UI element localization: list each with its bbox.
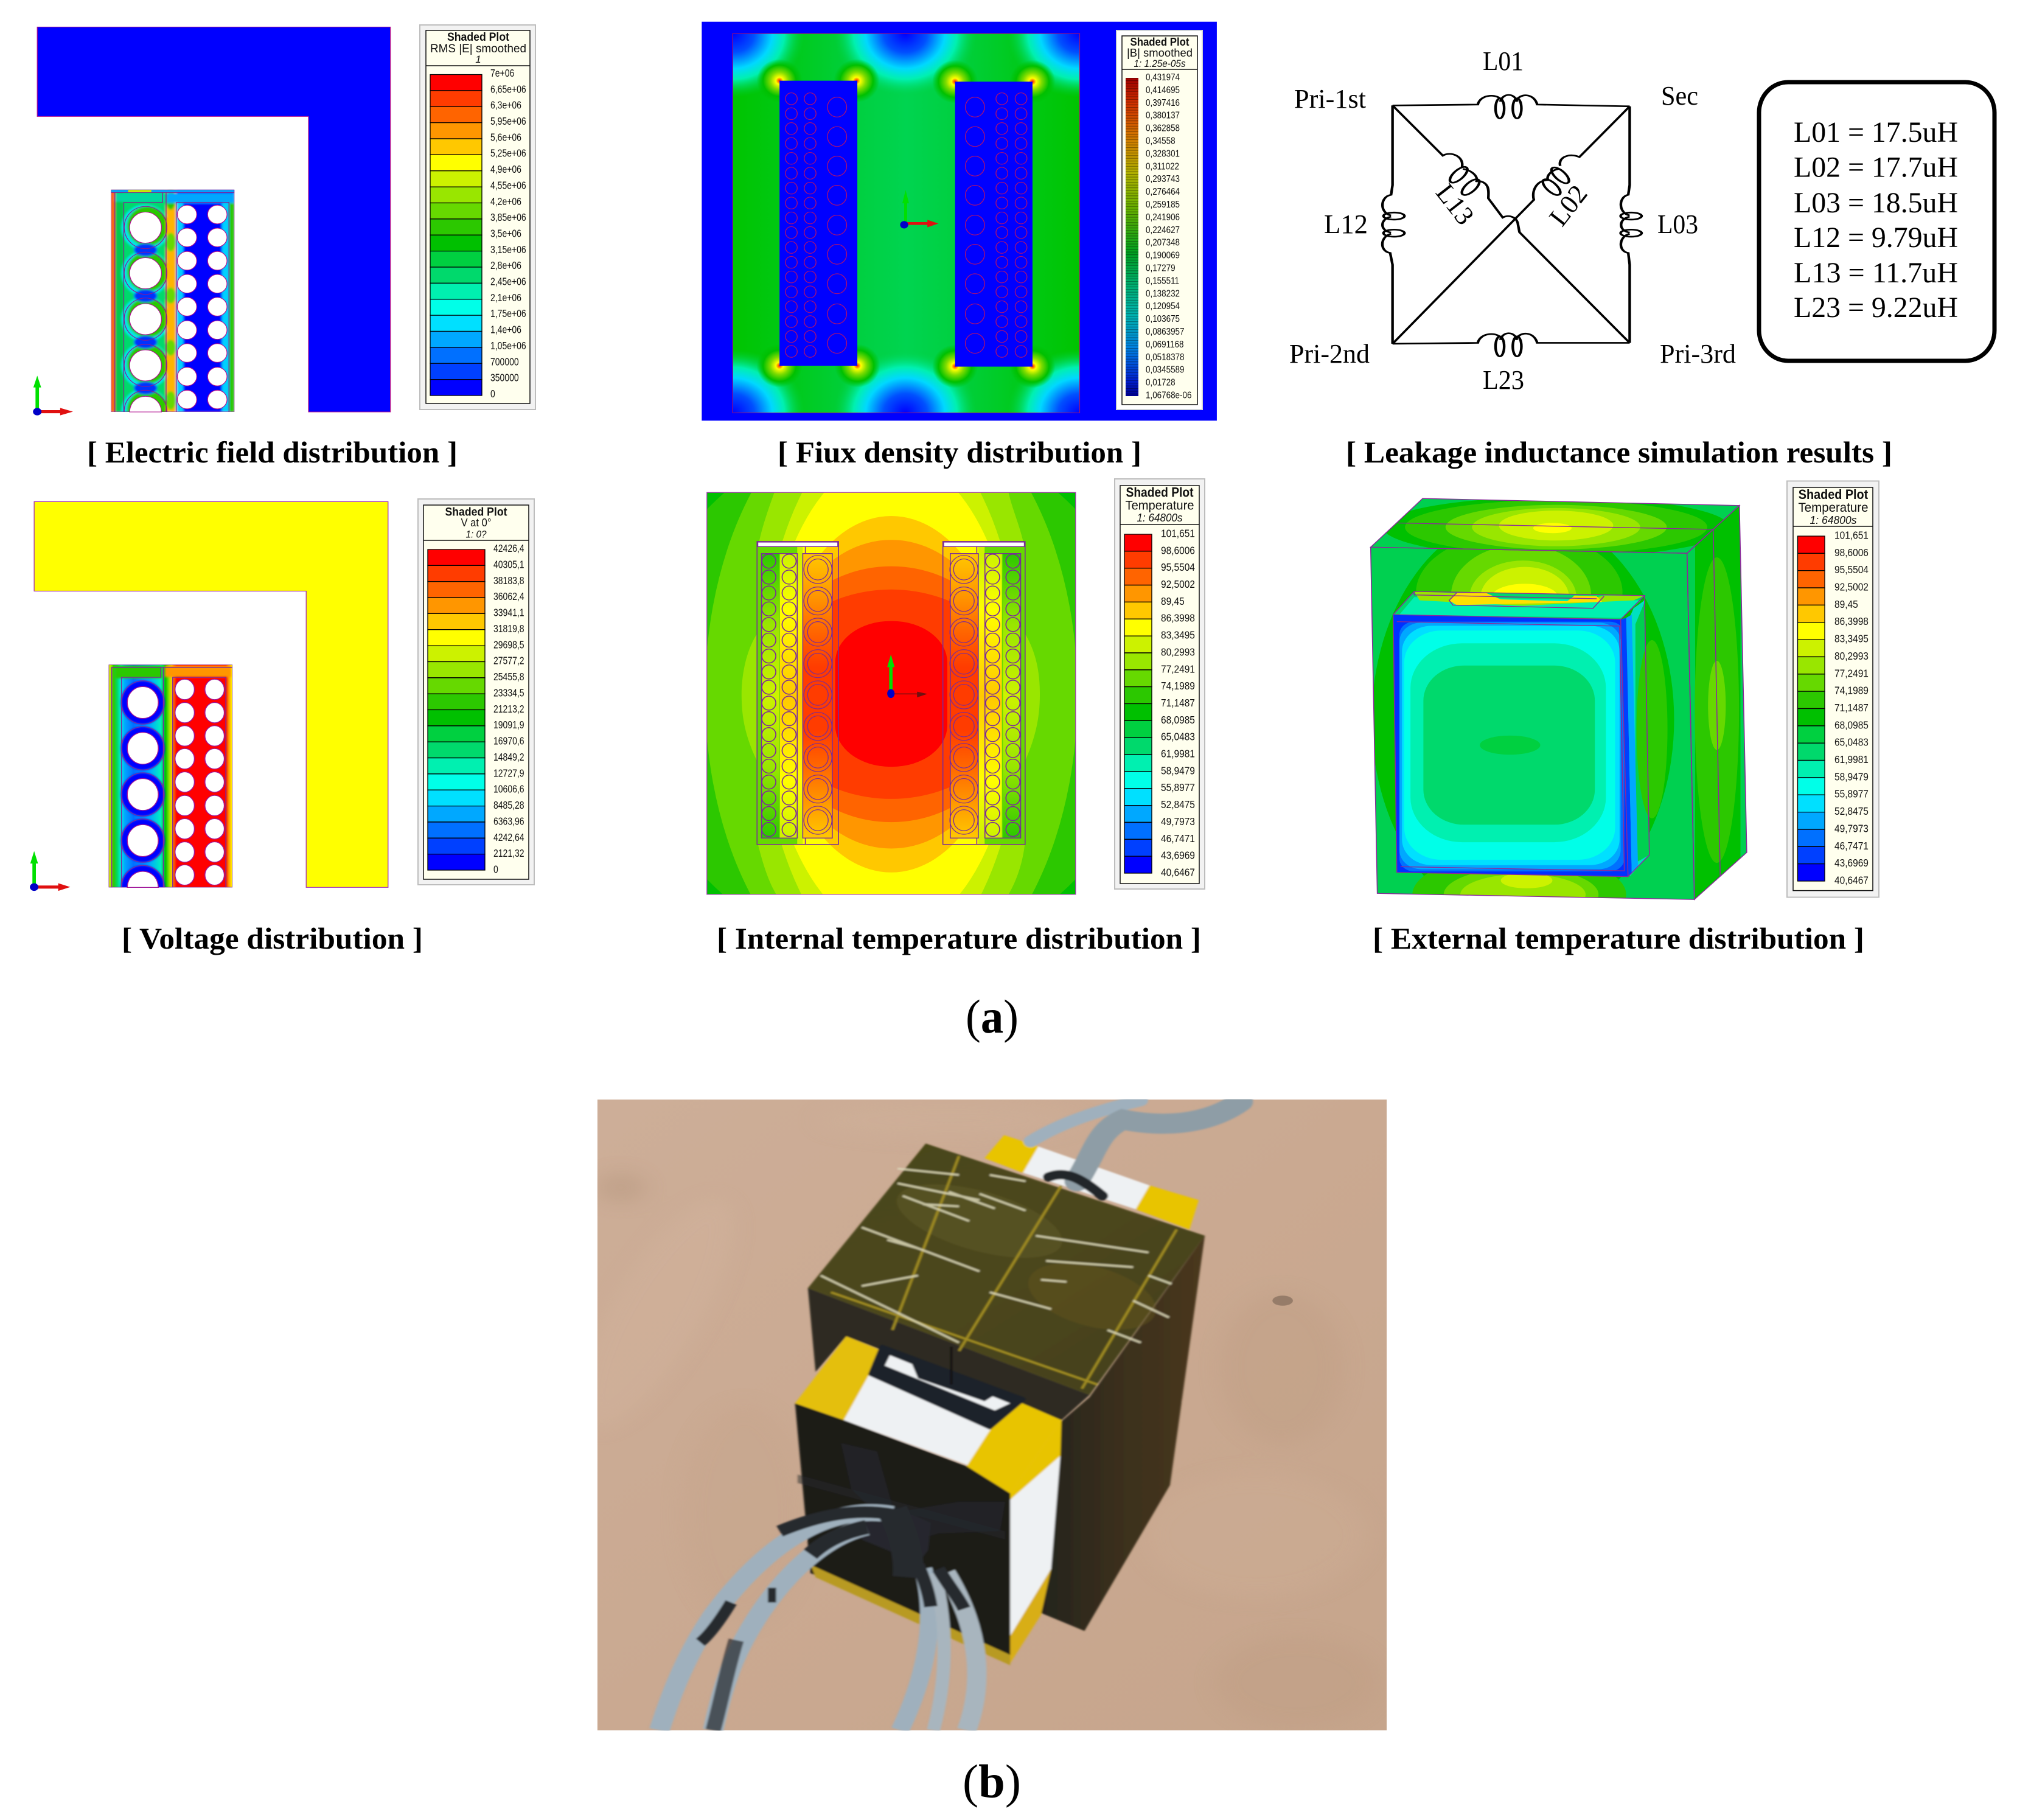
legend: internal temperature: 89,45 bbox=[1161, 595, 1185, 607]
legend: electric field: 7e+06 bbox=[490, 68, 514, 79]
legend: electric field bbox=[420, 25, 535, 410]
legend: external temperature: 55,8977 bbox=[1834, 788, 1869, 800]
legend: flux density: 0,155511 bbox=[1146, 276, 1179, 287]
legend: flux density: 0,01728 bbox=[1146, 378, 1176, 388]
circuit labels: Pri-3rd bbox=[1660, 339, 1736, 369]
legend: voltage: 29698,5 bbox=[493, 640, 524, 651]
circuit labels: Pri-2nd bbox=[1289, 339, 1370, 369]
label: (a): (a) bbox=[966, 990, 1019, 1043]
circuit labels: L01 bbox=[1483, 46, 1524, 76]
legend: electric field: 350000 bbox=[490, 372, 519, 384]
caption: flux density: [ Fiux density distribution ] bbox=[778, 435, 1141, 469]
legend: internal temperature: 58,9479 bbox=[1161, 764, 1195, 777]
legend: external temperature: 68,0985 bbox=[1834, 719, 1869, 731]
electric field plot bbox=[33, 27, 391, 434]
legend: voltage: Shaded Plot bbox=[445, 506, 507, 518]
legend: voltage: 0 bbox=[493, 864, 498, 876]
circuit labels: L12 bbox=[1324, 209, 1368, 239]
legend: flux density: 0,0691168 bbox=[1146, 340, 1183, 350]
legend: electric field: 0 bbox=[490, 389, 495, 400]
legend: electric field: 1,4e+06 bbox=[490, 324, 521, 336]
legend: electric field: 3,15e+06 bbox=[490, 244, 526, 256]
legend: electric field: 4,2e+06 bbox=[490, 196, 521, 207]
inductance values box: L02 = 17.7uH bbox=[1794, 152, 1958, 184]
legend: external temperature: 52,8475 bbox=[1834, 805, 1869, 817]
inductor circuit diagram bbox=[1289, 46, 1736, 395]
legend: external temperature: 40,6467 bbox=[1834, 874, 1869, 887]
legend: internal temperature: 92,5002 bbox=[1161, 578, 1195, 590]
legend: flux density: 0,293743 bbox=[1146, 174, 1180, 185]
legend: voltage: V at 0° bbox=[461, 517, 492, 529]
front coil black face bbox=[795, 1403, 1012, 1657]
inductance values box: L03 = 18.5uH bbox=[1794, 187, 1958, 219]
legend: flux density: 0,0518378 bbox=[1146, 352, 1185, 363]
legend: electric field: 1 bbox=[475, 54, 481, 65]
legend: flux density: 0,0863957 bbox=[1146, 327, 1185, 337]
legend: internal temperature: 86,3998 bbox=[1161, 612, 1195, 624]
flux density plot bbox=[702, 22, 1217, 421]
legend: internal temperature: 49,7973 bbox=[1161, 815, 1195, 828]
legend: external temperature: Shaded Plot bbox=[1799, 487, 1869, 502]
legend: external temperature: 46,7471 bbox=[1834, 840, 1869, 852]
legend: internal temperature: 71,1487 bbox=[1161, 697, 1195, 709]
legend: voltage: 1: 0? bbox=[466, 528, 487, 540]
legend: electric field: 5,25e+06 bbox=[490, 148, 526, 159]
circuit labels: L03 bbox=[1657, 209, 1698, 239]
legend: electric field: 1,05e+06 bbox=[490, 341, 526, 352]
caption: leakage inductance: [ Leakage inductance simulation results ] bbox=[1346, 435, 1892, 469]
legend: flux density: 0,34558 bbox=[1146, 136, 1176, 147]
caption: voltage: [ Voltage distribution ] bbox=[122, 921, 423, 955]
legend: internal temperature: 61,9981 bbox=[1161, 747, 1195, 760]
legend: external temperature: 65,0483 bbox=[1834, 736, 1869, 748]
legend: flux density: 0,311022 bbox=[1146, 161, 1179, 172]
legend: electric field: 5,6e+06 bbox=[490, 132, 521, 144]
legend: internal temperature: 98,6006 bbox=[1161, 544, 1195, 557]
panel: voltage distribution bbox=[30, 499, 534, 955]
legend: internal temperature bbox=[1115, 479, 1205, 889]
label: (b): (b) bbox=[963, 1755, 1021, 1808]
front coil top with yellow and white tape bbox=[795, 1336, 1061, 1500]
legend: electric field: 4,9e+06 bbox=[490, 164, 521, 176]
legend: voltage bbox=[418, 499, 534, 885]
circuit labels: Sec bbox=[1661, 81, 1698, 111]
legend: flux density: 0,276464 bbox=[1146, 187, 1180, 197]
legend: electric field: 2,1e+06 bbox=[490, 293, 521, 304]
inductance values box: L13 = 11.7uH bbox=[1794, 257, 1958, 289]
legend: flux density: 0,17279 bbox=[1146, 263, 1176, 274]
legend: voltage: 16970,6 bbox=[493, 736, 524, 747]
legend: internal temperature: 77,2491 bbox=[1161, 663, 1195, 675]
legend: external temperature: 86,3998 bbox=[1834, 615, 1869, 628]
legend: voltage: 21213,2 bbox=[493, 703, 524, 715]
wood table bbox=[597, 1100, 1387, 1731]
internal temperature plot bbox=[706, 492, 1076, 894]
transformer body bbox=[660, 1100, 1241, 1731]
core lid with kapton tape bbox=[808, 1143, 1205, 1395]
inductance values box: L12 = 9.79uH bbox=[1794, 222, 1958, 254]
legend: external temperature bbox=[1787, 481, 1879, 897]
panel: external temperature distribution bbox=[1371, 481, 1879, 955]
legend: flux density: 0,380137 bbox=[1146, 111, 1180, 121]
legend: internal temperature: Temperature bbox=[1126, 499, 1194, 512]
legend: flux density: 0,190069 bbox=[1146, 251, 1180, 261]
legend: voltage: 14849,2 bbox=[493, 752, 524, 763]
legend: voltage: 27577,2 bbox=[493, 655, 524, 667]
legend: electric field: 2,8e+06 bbox=[490, 260, 521, 272]
legend: flux density: 0,328301 bbox=[1146, 148, 1180, 159]
legend: electric field: 6,65e+06 bbox=[490, 84, 526, 96]
legend: flux density: 0,138232 bbox=[1146, 288, 1180, 299]
legend: external temperature: 77,2491 bbox=[1834, 667, 1869, 680]
caption: electric field: [ Electric field distribution ] bbox=[87, 435, 458, 469]
legend: voltage: 2121,32 bbox=[493, 848, 524, 860]
circuit labels: Pri-1st bbox=[1294, 84, 1366, 114]
panel: leakage inductance simulation results bbox=[1289, 46, 1994, 469]
legend: flux density: 0,207348 bbox=[1146, 238, 1180, 248]
legend: flux density: Shaded Plot bbox=[1130, 36, 1189, 48]
legend: external temperature: 83,3495 bbox=[1834, 633, 1869, 645]
legend: voltage: 25455,8 bbox=[493, 672, 524, 683]
front cables bbox=[660, 1513, 977, 1731]
panel: internal temperature distribution bbox=[706, 478, 1205, 955]
legend: flux density: 0,259185 bbox=[1146, 200, 1180, 210]
tape on cables bbox=[700, 1510, 964, 1731]
circuit labels: L02 bbox=[1543, 180, 1594, 232]
legend: external temperature: 89,45 bbox=[1834, 598, 1858, 610]
legend: electric field: 700000 bbox=[490, 357, 519, 368]
legend: voltage: 33941,1 bbox=[493, 607, 524, 619]
legend: voltage: 19091,9 bbox=[493, 720, 524, 731]
legend: flux density: 0,431974 bbox=[1146, 72, 1180, 83]
voltage plot bbox=[30, 501, 388, 908]
legend: flux density: 0,414695 bbox=[1146, 85, 1180, 96]
legend: electric field: 6,3e+06 bbox=[490, 100, 521, 111]
legend: flux density: 0,397416 bbox=[1146, 98, 1180, 108]
circuit labels bbox=[1289, 46, 1736, 395]
legend: external temperature: 71,1487 bbox=[1834, 702, 1869, 714]
photo: assembled transformer prototype bbox=[550, 1100, 1387, 1731]
legend: voltage: 23334,5 bbox=[493, 688, 524, 699]
legend: internal temperature: 101,651 bbox=[1161, 527, 1195, 540]
front coil side with white and yellow bbox=[810, 1456, 1061, 1665]
legend: external temperature: 61,9981 bbox=[1834, 753, 1869, 765]
circuit labels: L23 bbox=[1483, 365, 1524, 395]
circuit labels: L13 bbox=[1430, 178, 1480, 231]
legend: internal temperature: 65,0483 bbox=[1161, 731, 1195, 743]
panel: electric field distribution bbox=[33, 25, 535, 469]
legend: voltage: 12727,9 bbox=[493, 768, 524, 779]
legend: external temperature: 1: 64800s bbox=[1810, 514, 1857, 526]
external temperature 3D plot bbox=[1371, 497, 1748, 936]
legend: flux density: 0,224627 bbox=[1146, 225, 1180, 235]
legend: external temperature: 58,9479 bbox=[1834, 770, 1869, 783]
legend: electric field: 1,75e+06 bbox=[490, 309, 526, 320]
legend: internal temperature: 52,8475 bbox=[1161, 798, 1195, 811]
legend: internal temperature: 1: 64800s bbox=[1137, 512, 1183, 524]
legend: voltage: 42426,4 bbox=[493, 543, 524, 554]
legend: voltage: 38183,8 bbox=[493, 575, 524, 587]
caption: internal temperature: [ Internal temperature distribution ] bbox=[717, 921, 1201, 955]
legend: flux density: 0,0345589 bbox=[1146, 365, 1185, 375]
legend: external temperature: 43,6969 bbox=[1834, 857, 1869, 869]
legend: external temperature: 95,5504 bbox=[1834, 563, 1869, 576]
legend: voltage: 6363,96 bbox=[493, 816, 524, 828]
legend: flux density: 0,241906 bbox=[1146, 212, 1180, 223]
caption: external temperature: [ External temperature distribution ] bbox=[1373, 921, 1864, 955]
legend: electric field: 4,55e+06 bbox=[490, 180, 526, 192]
black tape bundle bbox=[798, 1443, 1005, 1577]
legend: internal temperature: 68,0985 bbox=[1161, 714, 1195, 726]
core side face bbox=[1041, 1236, 1205, 1631]
legend: external temperature: 74,1989 bbox=[1834, 685, 1869, 697]
inductance values box: L23 = 9.22uH bbox=[1794, 292, 1958, 324]
legend: flux density: |B| smoothed bbox=[1127, 47, 1193, 59]
legend: external temperature: Temperature bbox=[1799, 501, 1868, 515]
legend: electric field: 3,5e+06 bbox=[490, 228, 521, 240]
legend: internal temperature: 83,3495 bbox=[1161, 629, 1195, 641]
rear coil with yellow and white tape bbox=[984, 1135, 1199, 1229]
legend: voltage: 31819,8 bbox=[493, 624, 524, 635]
core inner face bbox=[808, 1288, 1090, 1420]
legend: electric field: 5,95e+06 bbox=[490, 116, 526, 127]
rear cables bbox=[1031, 1100, 1241, 1196]
legend: voltage: 8485,28 bbox=[493, 800, 524, 811]
legend: external temperature: 98,6006 bbox=[1834, 546, 1869, 559]
legend: electric field: RMS |E| smoothed bbox=[430, 43, 526, 55]
legend: flux density: 0,362858 bbox=[1146, 124, 1180, 134]
legend: internal temperature: 55,8977 bbox=[1161, 781, 1195, 794]
legend: external temperature: 92,5002 bbox=[1834, 581, 1869, 593]
legend: voltage: 36062,4 bbox=[493, 591, 524, 603]
legend: internal temperature: 80,2993 bbox=[1161, 646, 1195, 658]
inductance values box bbox=[1759, 82, 1994, 361]
legend: flux density: 1,06768e-06 bbox=[1146, 391, 1191, 401]
legend: external temperature: 49,7973 bbox=[1834, 822, 1869, 835]
legend: internal temperature: Shaded Plot bbox=[1126, 485, 1194, 500]
legend: internal temperature: 95,5504 bbox=[1161, 561, 1195, 573]
legend: flux density bbox=[1116, 30, 1202, 410]
panel: flux density distribution bbox=[702, 22, 1217, 469]
legend: voltage: 4242,64 bbox=[493, 832, 524, 843]
legend: flux density: 0,103675 bbox=[1146, 314, 1180, 324]
inductance values box: L01 = 17.5uH bbox=[1794, 117, 1958, 148]
legend: voltage: 10606,6 bbox=[493, 784, 524, 795]
legend: electric field: Shaded Plot bbox=[447, 31, 510, 44]
legend: electric field: 2,45e+06 bbox=[490, 276, 526, 288]
legend: electric field: 3,85e+06 bbox=[490, 212, 526, 224]
legend: external temperature: 101,651 bbox=[1834, 529, 1869, 542]
legend: external temperature: 80,2993 bbox=[1834, 650, 1869, 662]
legend: internal temperature: 40,6467 bbox=[1161, 866, 1195, 879]
legend: flux density: 0,120954 bbox=[1146, 301, 1180, 312]
legend: voltage: 40305,1 bbox=[493, 559, 524, 571]
legend: internal temperature: 43,6969 bbox=[1161, 849, 1195, 862]
legend: internal temperature: 46,7471 bbox=[1161, 832, 1195, 845]
legend: flux density: 1: 1.25e-05s bbox=[1134, 58, 1186, 69]
legend: internal temperature: 74,1989 bbox=[1161, 680, 1195, 692]
